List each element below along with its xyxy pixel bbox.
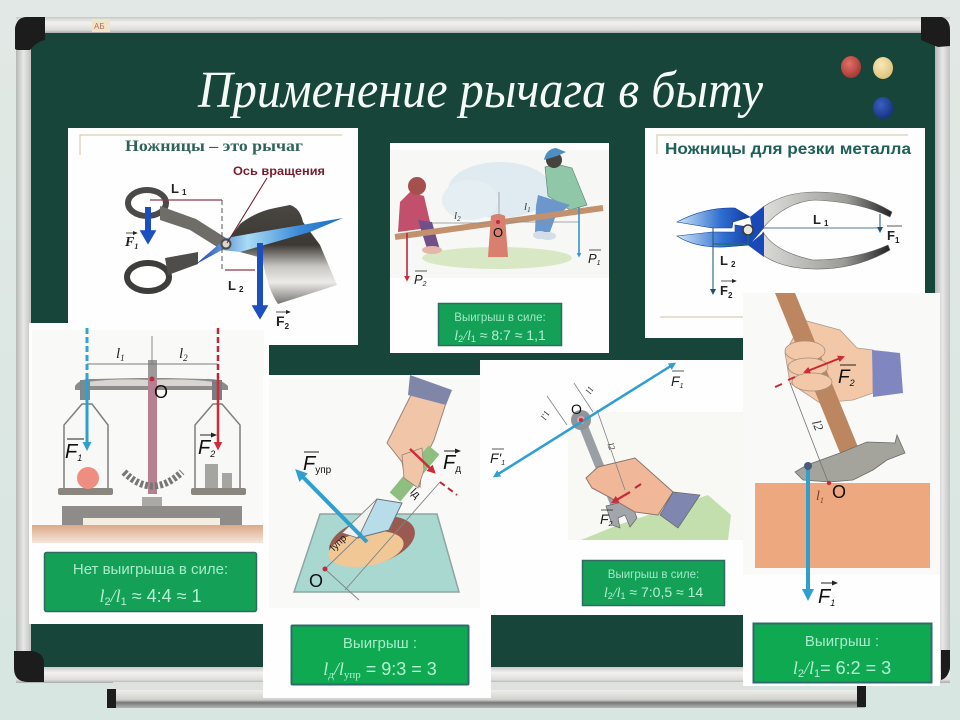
callout: no gain: 1 xyxy=(121,596,127,608)
label: L1: 1 xyxy=(182,188,187,197)
labels: hammer: O xyxy=(832,482,846,502)
icon: hammer handle xyxy=(775,293,858,453)
labels: seesaw: l xyxy=(524,201,527,213)
labels: shears: L xyxy=(720,253,728,268)
labels: seesaw: P xyxy=(588,251,597,266)
ground xyxy=(32,525,263,543)
labels: seesaw: 1 xyxy=(527,206,531,214)
callout: hammer gain: 1 xyxy=(814,668,820,680)
labels: wrench: F xyxy=(671,373,680,389)
icon: fingers xyxy=(402,448,424,488)
label: F1 xyxy=(124,233,138,251)
callout: no gain xyxy=(44,552,256,612)
callout: seesaw gain: ≈ 8:7 ≈ 1,1 xyxy=(476,327,546,343)
arrow: P1 xyxy=(578,207,580,256)
icon: scale xyxy=(58,360,246,525)
label: rotation axis: Ось вращения xyxy=(233,164,325,178)
labels: wrench: F xyxy=(600,511,609,527)
label: F2: 2 xyxy=(285,322,290,331)
labels: hammer: l xyxy=(816,489,820,504)
callout: no gain: /l xyxy=(110,586,121,606)
heading: metal shears: Ножницы для резки металла xyxy=(665,141,911,158)
arrow: F elastic xyxy=(298,472,367,542)
labels: hammer xyxy=(804,365,856,608)
callout: hammer gain: l xyxy=(793,658,798,678)
icon: hand back xyxy=(785,320,873,403)
labels: hammer: F xyxy=(818,586,830,608)
callout: seesaw gain xyxy=(438,304,562,346)
panel: metal shears xyxy=(645,128,925,338)
labels: knife xyxy=(303,451,461,591)
labels: shears xyxy=(720,212,902,300)
panel: hammer xyxy=(743,293,940,686)
labels: wrench: 1 xyxy=(501,460,505,467)
icon: sleeve xyxy=(872,350,903,397)
ground xyxy=(422,247,572,269)
thin lever lines xyxy=(325,482,440,600)
labels: knife: упр xyxy=(315,465,332,476)
icon: knife blade xyxy=(342,499,402,538)
callout: no gain: ≈ 4:4 ≈ 1 xyxy=(127,586,202,606)
panel: balance scale xyxy=(29,323,269,624)
labels: shears: F xyxy=(720,283,728,298)
label: L2: 2 xyxy=(239,285,244,294)
labels: hammer: 2 xyxy=(849,378,855,388)
thin lever lines xyxy=(547,383,625,490)
label: L1: L xyxy=(171,181,179,196)
labels: wrench: 2 xyxy=(608,521,613,528)
labels: scale: l xyxy=(179,346,183,362)
icon: weights xyxy=(205,464,232,488)
labels: scale: l xyxy=(116,346,120,362)
icon: girl xyxy=(398,177,442,254)
labels: knife: F xyxy=(443,452,455,474)
panel: scissors xyxy=(68,128,358,345)
labels: seesaw: O xyxy=(493,225,503,240)
icon: lever arm lines xyxy=(150,178,267,270)
labels: seesaw: P xyxy=(414,272,423,287)
label: F2 xyxy=(276,312,290,331)
callout: no gain: Нет выигрыша в силе: xyxy=(73,561,228,578)
labels: hammer: 1 xyxy=(830,598,835,608)
arrow: F2 xyxy=(613,484,641,502)
thin lever line xyxy=(790,383,828,482)
title: Применение рычага в быту xyxy=(197,62,764,119)
labels: scale: F xyxy=(198,437,210,459)
callout: knife gain xyxy=(292,626,468,684)
labels: seesaw: l xyxy=(454,210,457,222)
icon: cutting board xyxy=(294,514,459,592)
chalkboard: АБ xyxy=(94,22,105,31)
labels: shears: 1 xyxy=(895,236,900,245)
labels: seesaw: 2 xyxy=(422,281,427,288)
labels: knife: lд xyxy=(408,486,423,502)
icon: fingers xyxy=(785,341,832,391)
arrow: left force xyxy=(86,328,88,448)
thin lever lines xyxy=(87,336,218,364)
labels: wrench: 1 xyxy=(680,383,684,390)
labels: scale: 2 xyxy=(209,449,215,459)
labels: knife: O xyxy=(309,571,323,591)
labels: hammer: 1 xyxy=(820,496,824,505)
panel: wrench xyxy=(480,360,743,615)
callout: seesaw gain: Выигрыш в силе: xyxy=(454,312,546,324)
callout: wrench gain: Выигрыш в силе: xyxy=(608,569,699,581)
icon: boy xyxy=(533,148,587,240)
labels: scale: 2 xyxy=(183,353,188,363)
label: F1: F xyxy=(125,235,134,250)
callout: knife gain: l xyxy=(323,659,328,679)
labels: scale: 1 xyxy=(77,453,82,463)
icon: apple xyxy=(77,467,99,489)
heading: scissors: Ножницы – это рычаг xyxy=(125,138,303,155)
callout: wrench gain: 2 xyxy=(608,591,613,601)
callout: knife gain: = 9:3 = 3 xyxy=(361,659,437,679)
arrow: P2 xyxy=(406,233,408,280)
icon: wrench xyxy=(571,410,637,528)
arrow: right force xyxy=(217,328,219,448)
arrow: F applied xyxy=(410,449,457,495)
callout: wrench gain: /l xyxy=(612,586,621,601)
callout: hammer gain: Выигрыш : xyxy=(805,633,879,650)
background mound xyxy=(581,495,731,540)
callout: wrench gain: ≈ 7:0,5 ≈ 14 xyxy=(626,584,703,600)
callout: knife gain: /l xyxy=(333,659,344,679)
marker tray xyxy=(107,682,866,708)
labels: hammer: F xyxy=(838,367,850,388)
arrow: F2 xyxy=(257,243,263,307)
icon: blue magnet xyxy=(873,97,893,119)
labels: seesaw: 1 xyxy=(597,260,601,267)
labels: wrench xyxy=(490,371,684,528)
panel: seesaw xyxy=(390,143,609,353)
labels: scale: F xyxy=(65,441,77,463)
labels: scale: O xyxy=(154,382,168,402)
icon: hand xyxy=(586,458,700,528)
callout: wrench gain: 1 xyxy=(621,591,626,601)
icon: scissors xyxy=(127,190,343,291)
callout: seesaw gain: 2 xyxy=(458,334,463,344)
labels: shears: L xyxy=(813,212,821,227)
labels: shears: 1 xyxy=(824,219,829,228)
labels: knife: д xyxy=(455,464,461,475)
labels: hammer: l2 xyxy=(809,418,827,433)
icon: wood block xyxy=(755,483,930,568)
icon: red magnet xyxy=(841,56,861,78)
labels: wrench: F' xyxy=(490,450,501,466)
icon: bread xyxy=(324,507,420,575)
callout: wrench gain xyxy=(582,560,724,606)
labels: shears: 2 xyxy=(728,291,733,300)
labels: seesaw xyxy=(414,201,601,288)
arrow: F2 xyxy=(775,357,843,387)
icon: shears xyxy=(677,192,892,269)
callout: seesaw gain: 1 xyxy=(471,334,476,344)
callout: knife gain: Выигрыш : xyxy=(343,635,417,652)
callout: hammer gain: /l xyxy=(803,658,814,678)
icon: knife handle xyxy=(395,450,434,497)
arrow: F1 xyxy=(806,467,810,597)
callout: hammer gain xyxy=(754,624,932,682)
labels: shears: F xyxy=(887,228,895,243)
labels: knife: lупр xyxy=(329,533,349,554)
labels: wrench: l'1 xyxy=(539,409,552,422)
label: L2: L xyxy=(228,278,236,293)
arrow: F1 line xyxy=(495,364,674,476)
label: F1: 1 xyxy=(134,242,138,251)
callout: no gain: 2 xyxy=(104,596,111,608)
callout: hammer gain: 2 xyxy=(798,668,804,680)
icon: hand xyxy=(387,375,452,487)
callout: knife gain: упр xyxy=(344,669,361,681)
label: F2: F xyxy=(276,313,285,329)
icon: yellow magnet xyxy=(873,57,893,79)
callout: wrench gain: l xyxy=(604,586,608,601)
labels: wrench: l1 xyxy=(584,385,596,396)
icon: fulcrum xyxy=(488,214,508,257)
panel: knife xyxy=(263,375,491,698)
arrow: F1 xyxy=(145,207,151,232)
icon: cloth xyxy=(225,205,337,304)
labels: scale xyxy=(65,346,216,463)
labels: wrench: l2 xyxy=(605,441,617,452)
labels: knife: F xyxy=(303,453,315,475)
labels: seesaw: 2 xyxy=(457,215,461,223)
callout: hammer gain: = 6:2 = 3 xyxy=(820,658,891,678)
labels: scale: 1 xyxy=(120,353,125,363)
icon: seesaw plank xyxy=(395,208,603,237)
labels: shears: 2 xyxy=(731,260,736,269)
labels: wrench: O xyxy=(571,401,582,417)
icon: shear lever lines xyxy=(713,214,880,294)
icon: hammer head xyxy=(795,435,905,482)
callout: knife gain: д xyxy=(328,669,334,681)
callout: seesaw gain: /l xyxy=(462,329,471,344)
callout: seesaw gain: l xyxy=(454,329,458,344)
callout: no gain: l xyxy=(99,586,104,606)
